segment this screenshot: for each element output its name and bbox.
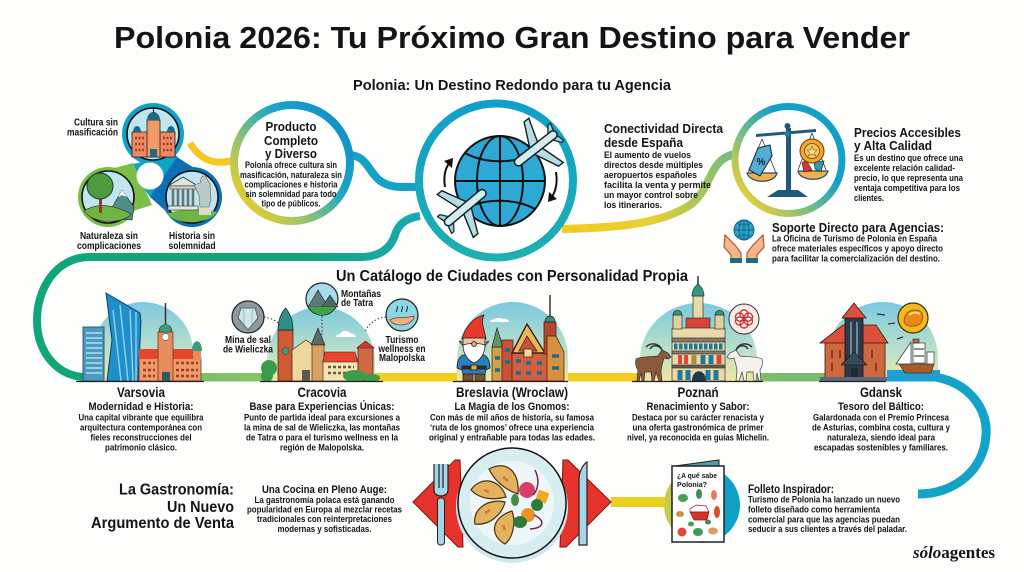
label: mina: Mina de sal: [225, 335, 271, 346]
label: cultura: Cultura sin: [74, 118, 118, 128]
text: producto: sin solemnidad para todo: [246, 189, 337, 200]
text: producto: tipo de públicos.: [262, 198, 320, 210]
icon: hands and globe: [724, 220, 764, 263]
icon: amber: [898, 303, 928, 333]
label: naturaleza: [77, 231, 141, 252]
icon: history: [166, 171, 218, 223]
icon: plate with pierogi: [413, 448, 611, 563]
text: soporte: para facilitar la comercialización del destino.: [772, 254, 940, 264]
text: folleto: seducir a sus clientes a través del paladar.: [748, 524, 907, 535]
icon: globe: [455, 136, 545, 226]
icon cluster: three values: [67, 103, 222, 252]
text: conectividad: facilita la venta y permite: [604, 180, 711, 191]
text: folleto: folleto diseñado como herramienta: [748, 504, 881, 516]
text: folleto: Turismo de Polonia ha lanzado un nuevo: [748, 494, 900, 506]
illustration: Breslavia: [453, 295, 568, 382]
text: conectividad: aeropuertos españoles: [604, 170, 697, 181]
city text: Poznań: una oferta gastronómica de primer: [632, 422, 764, 434]
illustration: Cracovia: [223, 283, 426, 382]
city text: Breslavia: La Magia de los Gnomos:: [454, 401, 570, 413]
city text: Cracovia: Cracovia: [298, 384, 347, 400]
label: naturaleza: complicaciones: [77, 241, 141, 252]
heading: producto: y Diverso: [265, 146, 317, 161]
panel: globe connectivity: [419, 104, 574, 258]
town hall: [492, 316, 564, 381]
city text: Varsovia: Modernidad e Historia:: [88, 401, 194, 413]
icon: brown goat: [636, 344, 671, 381]
text: precios: excelente relación calidad-: [854, 163, 955, 174]
text: cocina: popularidad en Europa al mezclar recetas: [247, 504, 402, 516]
text: soporte: Soporte Directo para Agencias:: [772, 221, 944, 235]
city text: Varsovia: [78, 384, 204, 454]
icon: brochure: ¿A qué sabe: [677, 471, 717, 480]
city text: Cracovia: Base para Experiencias Únicas:: [250, 400, 394, 413]
text: cocina: modernas y sofisticadas.: [278, 524, 372, 535]
ship: [896, 339, 934, 373]
text: cocina: [247, 484, 402, 535]
city text: Poznań: Renacimiento y Sabor:: [646, 401, 750, 413]
icon: castle: [127, 108, 179, 160]
city text: Varsovia: Varsovia: [117, 384, 165, 400]
city text: Gdansk: Galardonada con el Premio Princesa: [813, 412, 950, 424]
text: cocina: La gastronomía polaca está ganando: [254, 495, 395, 506]
text: soporte: ofrece materiales específicos y apoyo directo: [772, 244, 943, 254]
heading: gastronomía: Un Nuevo: [167, 499, 234, 516]
label: historia: solemnidad: [168, 241, 216, 252]
text: cocina: Una Cocina en Pleno Auge:: [262, 484, 387, 496]
icon: brochure: Polonia?: [677, 480, 707, 489]
heading: gastronomía: [91, 482, 234, 532]
icon: arrows: [444, 158, 557, 202]
panel: scales: [735, 106, 842, 214]
city text: Cracovia: región de Malopolska.: [280, 442, 364, 454]
city text: Gdansk: Gdansk: [860, 384, 902, 400]
icon: michelin rosette: [729, 304, 759, 334]
icon: plane top: [498, 110, 574, 186]
label: mina: de Wieliczka: [223, 344, 273, 356]
heading: catalogo: Un Catálogo de Ciudades con Personalidad Propia: [336, 268, 688, 285]
illustration: Gdansk: [819, 302, 940, 382]
label: montañas: de Tatra: [341, 298, 373, 309]
city text: Varsovia: arquitectura contemporánea con: [80, 422, 202, 434]
text: precios: precio, lo que representa una: [854, 173, 964, 184]
icon: white goat: [727, 344, 762, 381]
illustration: Varsovia: [76, 293, 204, 382]
city text: Gdansk: [812, 384, 951, 454]
logo: sóloagentes: sóloagentes: [912, 543, 995, 562]
icon: scales: %: [757, 157, 766, 168]
city text: Gdansk: escapadas sostenibles y familiares.: [814, 442, 948, 454]
text: precios: Es un destino que ofrece una: [854, 153, 964, 164]
city text: Varsovia: Una capital vibrante que equilibra: [78, 412, 204, 424]
text: conectividad: desde España: [604, 135, 684, 150]
icon: plane bottom: [427, 169, 503, 246]
city text: Breslavia: Con más de mil años de historia, su famosa: [430, 412, 595, 424]
text: folleto: [748, 484, 907, 535]
label: turismo: wellness en: [378, 344, 426, 355]
label: historia: [168, 231, 216, 252]
text: precios: y Alta Calidad: [854, 138, 932, 153]
city text: Breslavia: original y entrañable para todas las edades.: [429, 432, 595, 444]
text: soporte: [772, 221, 944, 264]
city text: Varsovia: fieles reconstrucciones del: [90, 432, 192, 444]
city text: Gdansk: Tesoro del Báltico:: [838, 401, 924, 413]
gnome: [457, 315, 490, 381]
text: conectividad: los itinerarios.: [604, 200, 662, 211]
text: cocina: tradicionales con reinterpretaciones: [257, 514, 392, 525]
illustration: Poznań: [632, 276, 763, 382]
label: turismo: Malopolska: [379, 353, 425, 364]
text: folleto: Folleto Inspirador:: [748, 484, 834, 496]
text: precios: clientes.: [854, 193, 884, 204]
subtitle: top section: Polonia: Un Destino Redondo para tu Agencia: [353, 77, 672, 94]
city text: Breslavia: [429, 384, 595, 444]
text: conectividad: El aumento de vuelos: [604, 150, 691, 161]
city text: Gdansk: naturaleza, siendo ideal para: [827, 432, 936, 444]
icon: Tatra mountains: [306, 283, 338, 315]
city text: Breslavia: Breslavia (Wroclaw): [456, 384, 568, 400]
text: precios: ventaja competitiva para los: [854, 183, 960, 194]
icon: salt mine: [232, 301, 264, 333]
label: mina: [223, 335, 273, 356]
label: montañas: [341, 289, 381, 309]
heading: gastronomía: La Gastronomía:: [119, 482, 234, 498]
label: cultura: masificación: [67, 128, 118, 138]
heading: producto: Completo: [264, 133, 318, 148]
icon: wellness: [386, 299, 418, 331]
city text: Poznań: [627, 384, 769, 444]
label: turismo: [378, 335, 426, 364]
text: producto: Polonia ofrece cultura sin: [245, 160, 337, 171]
icon: brochure: [664, 460, 740, 543]
title: Polonia 2026: Tu Próximo Gran Destino para Vender: [114, 20, 910, 55]
city text: Cracovia: la mina de sal de Wieliczka, las montañas: [244, 422, 400, 434]
label: montañas: Montañas: [341, 289, 381, 300]
heading: gastronomía: Argumento de Venta: [91, 515, 234, 532]
city text: Poznań: Poznań: [678, 384, 718, 400]
label: historia: Historia sin: [169, 231, 215, 242]
connector paths: [37, 143, 986, 502]
heading: producto: [264, 119, 318, 161]
dotted connectors: [264, 316, 386, 335]
city text: Gdansk: de Asturias, combina costa, cultura y: [812, 422, 951, 434]
text: producto: complicaciones e historia: [244, 180, 338, 190]
text: soporte: La Oficina de Turismo de Polonia en España: [772, 234, 938, 244]
label: turismo: Turismo: [386, 335, 418, 346]
city text: Varsovia: patrimonio clásico.: [105, 442, 177, 454]
city text: Cracovia: Punto de partida ideal para excursiones a: [244, 412, 401, 424]
text: conectividad: un mayor control sobre: [604, 190, 698, 201]
text: precios: Precios Accesibles: [854, 125, 961, 140]
city text: Breslavia: ‘ruta de los gnomos’ ofrece una experiencia: [430, 422, 595, 434]
text: conectividad: Conectividad Directa: [604, 121, 724, 136]
text: conectividad: [604, 121, 724, 211]
text: producto: [240, 160, 342, 210]
city text: Cracovia: de Tatra o para el turismo wellness en la: [246, 432, 399, 444]
city text: Poznań: Destaca por su carácter renacista y: [632, 412, 765, 424]
icon: nature: [82, 171, 134, 223]
label: naturaleza: Naturaleza sin: [80, 231, 138, 242]
label: cultura: [67, 118, 118, 138]
panel: producto completo: [234, 105, 350, 221]
city text: Cracovia: [244, 384, 401, 454]
city text: Poznań: nivel, ya reconocida en guías Michelin.: [627, 432, 769, 444]
text: folleto: comercial para que las agencias puedan: [748, 514, 900, 526]
text: precios: [854, 125, 964, 204]
text: conectividad: directos desde múltiples: [604, 160, 703, 171]
heading: producto: Producto: [266, 119, 317, 134]
text: producto: masificación, naturaleza sin: [240, 170, 342, 181]
